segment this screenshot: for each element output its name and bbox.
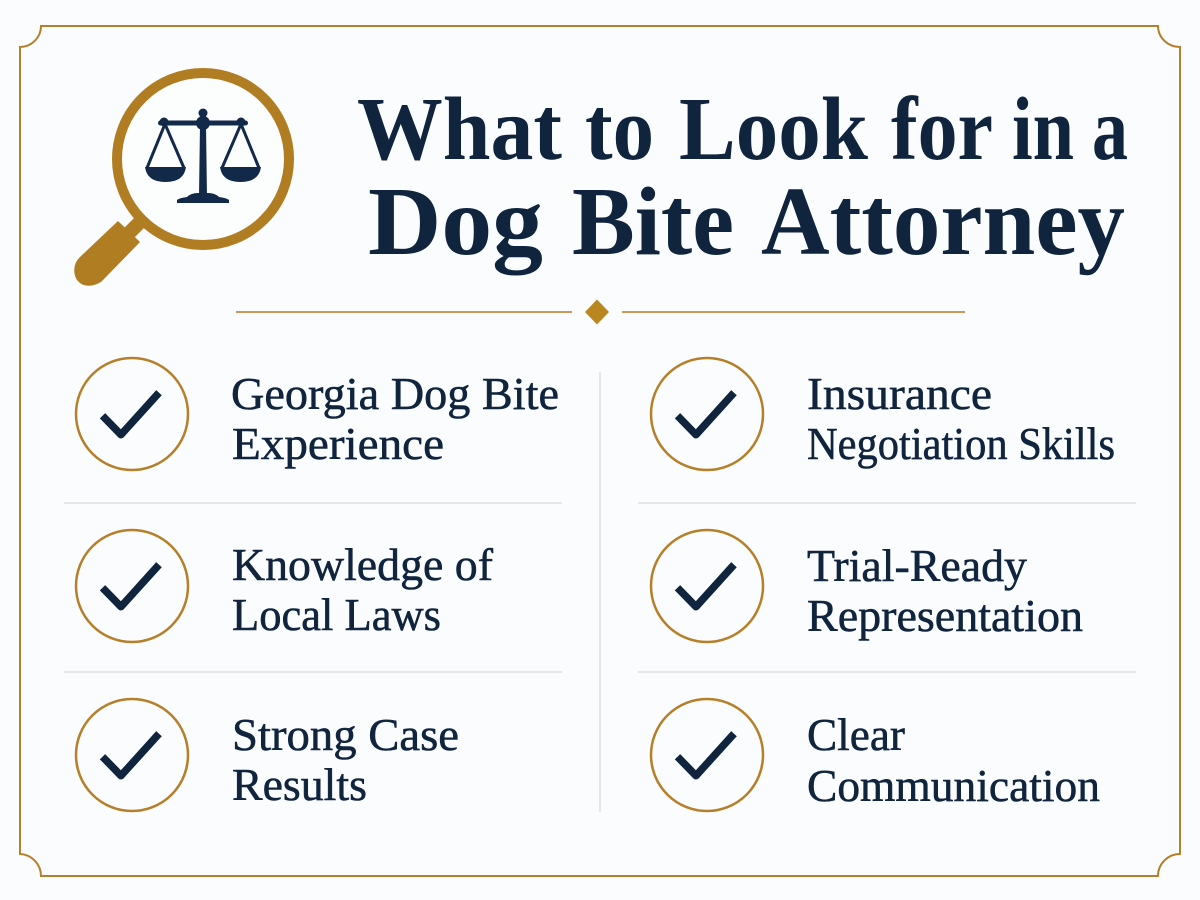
item: Insurance Negotiation Skills: Insurance <box>807 368 992 419</box>
title: Attorney <box>761 168 1125 275</box>
item: Georgia Dog Bite Experience <box>76 358 559 470</box>
item: Strong Case Results: Strong Case <box>232 709 459 760</box>
item: Georgia Dog Bite Experience: Experience <box>232 418 444 469</box>
title: Dog <box>368 168 543 275</box>
title: a <box>1092 80 1128 179</box>
item: Insurance Negotiation Skills <box>651 358 1115 470</box>
icon: magnifying glass with scales of justice <box>75 73 289 285</box>
item: Strong Case Results <box>76 699 459 811</box>
item: Trial-Ready Representation: Trial-Ready <box>807 540 1027 591</box>
scales of justice <box>145 108 261 203</box>
magnifying glass handle <box>75 216 146 285</box>
item: Knowledge of Local Laws <box>76 530 494 642</box>
magnifying glass ring <box>117 73 289 245</box>
title: Bite <box>572 168 734 275</box>
item: Clear Communication <box>651 699 1100 811</box>
item dividers <box>64 372 1136 812</box>
item: Georgia Dog Bite Experience: Georgia Dog Bite <box>231 368 559 419</box>
title divider with diamond <box>236 300 965 324</box>
title <box>357 80 1128 275</box>
title: to <box>585 80 654 179</box>
item: Insurance Negotiation Skills: Negotiation Skills <box>807 418 1115 469</box>
item: Clear Communication: Clear <box>807 709 905 760</box>
item: Trial-Ready Representation: Representation <box>807 590 1083 641</box>
item: Strong Case Results: Results <box>232 759 367 810</box>
item: Trial-Ready Representation <box>651 530 1083 642</box>
title: in <box>1012 80 1074 179</box>
title: Look <box>679 80 868 179</box>
title: for <box>891 80 993 179</box>
item: Knowledge of Local Laws: Local Laws <box>232 589 441 640</box>
item: Knowledge of Local Laws: Knowledge of <box>232 539 494 590</box>
item: Clear Communication: Communication <box>807 760 1100 811</box>
title: What <box>357 80 562 179</box>
